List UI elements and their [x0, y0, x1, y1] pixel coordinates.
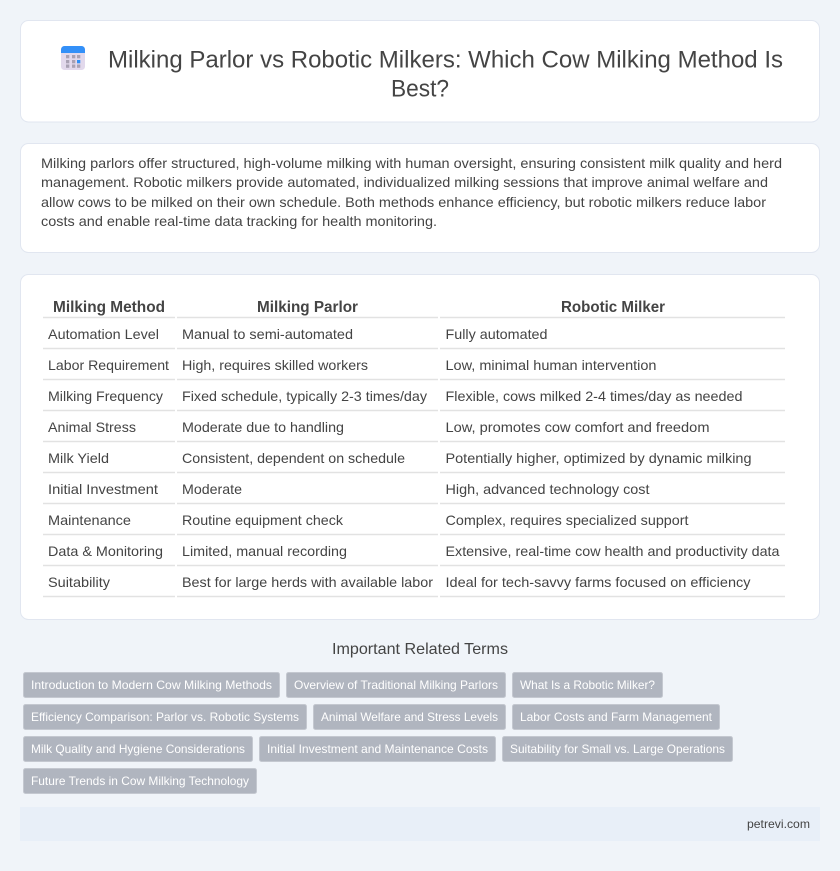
tag [24, 736, 252, 762]
tag [314, 704, 506, 730]
panel: comparison table [20, 274, 820, 620]
row: suitability [48, 574, 750, 590]
related term tags [24, 672, 732, 794]
row: animal stress: Moderate due to handling [182, 419, 344, 435]
tag: Future Trends in Cow Milking Technology [31, 774, 249, 788]
table header [53, 299, 665, 316]
tag: Animal Welfare and Stress Levels [321, 710, 498, 724]
footer source text: petrevi.com [747, 817, 810, 831]
row: milk yield: Potentially higher, optimized by dynamic milking [446, 450, 752, 466]
heading: important related terms: Important Related Terms [332, 641, 508, 658]
tag: What Is a Robotic Milker? [520, 678, 655, 692]
row: suitability: Best for large herds with available labor [182, 574, 433, 590]
row: maintenance: Routine equipment check [182, 512, 344, 528]
panel: introduction [20, 144, 820, 252]
intro text: management. Robotic milkers provide automated, individualized milking sessions that improve animal welfare and [41, 174, 768, 190]
row: milking frequency: Flexible, cows milked 2-4 times/day as needed [446, 388, 742, 404]
tag: Initial Investment and Maintenance Costs [267, 742, 488, 756]
tag [24, 768, 256, 794]
title: Best? [391, 76, 449, 102]
row: initial investment: Initial Investment [48, 481, 158, 497]
row: animal stress [48, 419, 710, 435]
row: automation level [48, 326, 548, 342]
row: initial investment [48, 481, 650, 497]
tag [512, 704, 720, 730]
row: milking frequency: Milking Frequency [48, 388, 163, 404]
table header: Milking Method [53, 299, 165, 316]
tag: Suitability for Small vs. Large Operations [510, 742, 725, 756]
row: automation level: Automation Level [48, 326, 159, 342]
row: initial investment: High, advanced technology cost [446, 481, 650, 497]
tag: Overview of Traditional Milking Parlors [294, 678, 498, 692]
row: labor requirement: Labor Requirement [48, 357, 169, 373]
header panel [20, 20, 820, 122]
tag [286, 672, 506, 698]
row: labor requirement: Low, minimal human intervention [446, 357, 656, 373]
tag: Labor Costs and Farm Management [520, 710, 713, 724]
row: suitability: Ideal for tech-savvy farms focused on efficiency [446, 574, 750, 590]
row: data and monitoring: Data & Monitoring [48, 543, 163, 559]
row: data and monitoring: Extensive, real-time cow health and productivity data [446, 543, 780, 559]
table header: Milking Parlor [257, 299, 358, 316]
intro text: costs and enable real-time data tracking for health monitoring. [41, 213, 437, 229]
tag [24, 704, 306, 730]
row: labor requirement [48, 357, 656, 373]
row: milk yield [48, 450, 752, 466]
row: milking frequency [48, 388, 742, 404]
row: data and monitoring [48, 543, 780, 559]
row: milk yield: Consistent, dependent on schedule [182, 450, 405, 466]
row: animal stress: Low, promotes cow comfort and freedom [446, 419, 710, 435]
intro text: Milking parlors offer structured, high-volume milking with human oversight, ensuring consistent milk quality and herd [41, 155, 782, 171]
tag [502, 736, 732, 762]
row: labor requirement: High, requires skilled workers [182, 357, 368, 373]
footer [20, 807, 820, 841]
row: milk yield: Milk Yield [48, 450, 109, 466]
icon: calendar [61, 46, 85, 70]
table header: Robotic Milker [561, 299, 665, 316]
row: initial investment: Moderate [182, 481, 242, 497]
tag [24, 672, 280, 698]
row: animal stress: Animal Stress [48, 419, 136, 435]
row: automation level: Fully automated [446, 326, 548, 342]
tag: Introduction to Modern Cow Milking Methods [31, 678, 272, 692]
row: data and monitoring: Limited, manual recording [182, 543, 347, 559]
tag: Milk Quality and Hygiene Considerations [31, 742, 245, 756]
row: milking frequency: Fixed schedule, typically 2-3 times/day [182, 388, 427, 404]
tag: Efficiency Comparison: Parlor vs. Robotic Systems [31, 710, 299, 724]
row: maintenance: Complex, requires specialized support [446, 512, 689, 528]
tag [512, 672, 662, 698]
title: Milking Parlor vs Robotic Milkers: Which Cow Milking Method Is [108, 46, 783, 74]
row: suitability: Suitability [48, 574, 110, 590]
row: maintenance: Maintenance [48, 512, 131, 528]
row: automation level: Manual to semi-automated [182, 326, 353, 342]
row: maintenance [48, 512, 689, 528]
tag [260, 736, 496, 762]
intro text: allow cows to be milked on their own schedule. Both methods enhance efficiency, but robotic milkers reduce labor [41, 194, 766, 210]
